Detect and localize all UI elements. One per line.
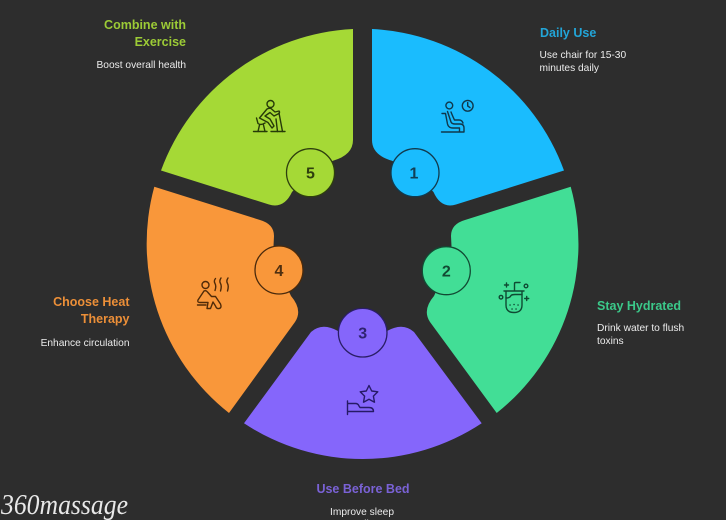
- number badge 4: [255, 246, 303, 294]
- icon: person seated in chair with clock: [442, 100, 473, 132]
- number badge 3: [338, 308, 387, 357]
- segment 1: daily use: [372, 29, 564, 205]
- label: combine with exercise: [97, 18, 186, 71]
- number badge 2: [422, 247, 470, 295]
- icon: bed with star: [348, 386, 378, 414]
- label: use before bed: Improve sleep: [330, 507, 394, 518]
- label: choose heat therapy: Choose Heat: [53, 295, 130, 309]
- number badge 3: 3: [358, 326, 367, 342]
- segment 2: stay hydrated: [422, 187, 578, 413]
- label: choose heat therapy: Therapy: [81, 312, 130, 326]
- number badge 1: [391, 149, 439, 197]
- label: use before bed: [316, 482, 410, 520]
- number badge 5: [286, 149, 334, 197]
- label: combine with exercise: Exercise: [135, 35, 186, 49]
- label: stay hydrated: Stay Hydrated: [597, 299, 681, 313]
- label: use before bed: Use Before Bed: [316, 482, 410, 496]
- label: choose heat therapy: [41, 295, 130, 349]
- label: daily use: minutes daily: [540, 63, 600, 74]
- number badge 2: 2: [442, 264, 451, 280]
- segment 3: use before bed: [244, 308, 482, 459]
- label: daily use: Daily Use: [540, 26, 596, 40]
- segment 5: combine with exercise: [161, 29, 353, 205]
- icon: person on exercise bike: [254, 100, 285, 132]
- icon: drink cup with straw and bubbles: [499, 282, 529, 312]
- segment 4: choose heat therapy: [147, 187, 303, 413]
- label: combine with exercise: Boost overall health: [97, 60, 186, 71]
- label: stay hydrated: Drink water to flush: [597, 323, 684, 334]
- number badge 4: 4: [275, 263, 284, 280]
- label: stay hydrated: [597, 299, 684, 347]
- label: daily use: [540, 26, 626, 74]
- label: choose heat therapy: Enhance circulation: [41, 338, 130, 349]
- label: stay hydrated: toxins: [597, 336, 624, 347]
- icon: person in sauna with steam: [198, 278, 228, 309]
- number badge 1: 1: [410, 166, 419, 182]
- label: daily use: Use chair for 15-30: [540, 50, 626, 61]
- number badge 5: 5: [306, 166, 315, 182]
- label: combine with exercise: Combine with: [104, 18, 186, 32]
